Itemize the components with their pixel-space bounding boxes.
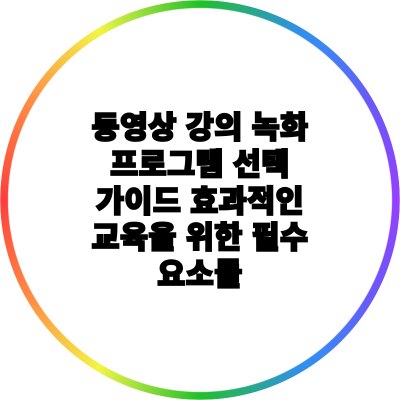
title: [92, 111, 308, 292]
title: 가이드 효과적인: [96, 185, 304, 219]
title: 프로그램 선택: [110, 148, 290, 182]
title: 요소들: [157, 258, 243, 292]
title: 교육을 위한 필수: [92, 221, 308, 255]
title: 동영상 강의 녹화: [92, 111, 308, 145]
